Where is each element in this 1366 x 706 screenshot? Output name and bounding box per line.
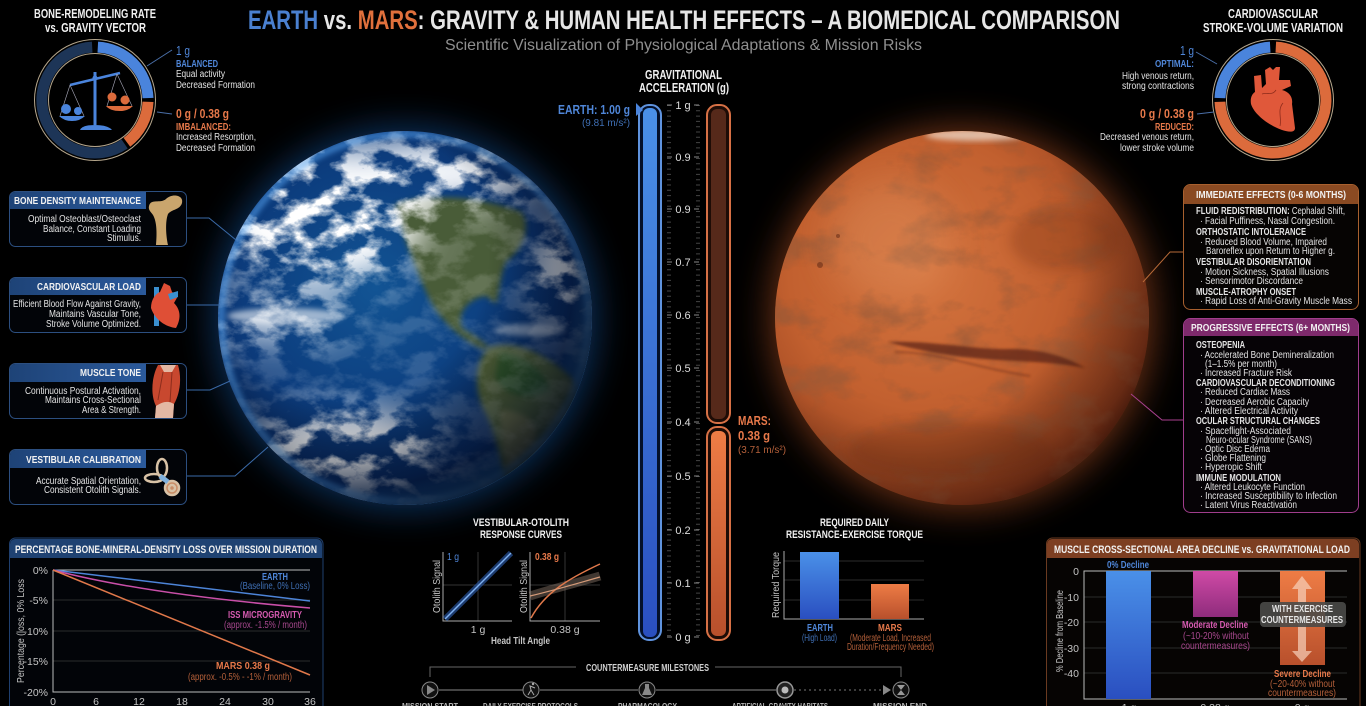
list: progressive effects [1196, 340, 1337, 511]
scale ticks: 0.2 [675, 525, 691, 537]
connectors: earth [187, 218, 268, 476]
list: progressive effects: · Accelerated Bone Demineralization [1200, 350, 1334, 361]
label: mars gravity: 0.38 g [738, 428, 770, 443]
planet: Mars [771, 127, 1153, 509]
panel: immediate effects [1184, 184, 1358, 310]
list: progressive effects: OCULAR STRUCTURAL CHANGES [1196, 416, 1320, 427]
label: earth gravity [558, 102, 630, 129]
axis labels: -15% [23, 656, 48, 668]
line label: ISS: ISS MICROGRAVITY [228, 610, 302, 621]
line label: earth: (Baseline, 0% Loss) [240, 581, 310, 592]
bars [800, 552, 909, 619]
bone remodeling widget [34, 7, 256, 160]
icon: inner ear [145, 459, 179, 495]
bars [1106, 571, 1325, 699]
line label: mars [188, 661, 292, 683]
bar label: moderate: (~10-20% without [1183, 631, 1249, 642]
legend: balanced: 1 g [176, 44, 190, 58]
callout: with exercise [1260, 602, 1346, 627]
axis labels [431, 560, 580, 647]
donut ring [1212, 40, 1334, 160]
legend: reduced: REDUCED: [1155, 122, 1194, 133]
timeline: countermeasure milestones [402, 662, 927, 706]
list: progressive effects: · Globe Flattening [1200, 453, 1266, 464]
legend: balanced: BALANCED [176, 59, 218, 70]
axis labels: 0% [33, 565, 48, 577]
panel: bone mineral density chart [10, 538, 323, 706]
chart: resistance exercise torque [770, 517, 934, 653]
heading: vestibular [473, 517, 569, 541]
heading: gravitational acceleration: ACCELERATION (g) [639, 81, 729, 95]
legend: optimal: High venous return, [1122, 71, 1194, 82]
scale ticks: 0 g [675, 632, 691, 644]
heading: bone remodeling: BONE-REMODELING RATE [34, 7, 156, 21]
legend: imbalanced: 0 g / 0.38 g [176, 107, 229, 121]
panel: bone density maintenance: Balance, Constant Loading [43, 224, 141, 235]
heading: gravitational acceleration: GRAVITATIONAL [645, 68, 722, 82]
icon: anatomical heart [151, 283, 180, 328]
list: progressive effects: · Spaceflight-Associated [1200, 426, 1291, 437]
callout: with exercise: COUNTERMEASURES [1261, 615, 1343, 626]
list: progressive effects: · Latent Virus Reactivation [1200, 500, 1297, 511]
icon: hourglass [893, 682, 909, 698]
stroke volume widget [1100, 7, 1343, 160]
list: immediate effects: · Facial Puffiness, Nasal Congestion. [1200, 216, 1335, 227]
heading: stroke volume: CARDIOVASCULAR [1228, 7, 1318, 21]
list: immediate effects: ORTHOSTATIC INTOLERANCE [1196, 227, 1306, 238]
list: immediate effects: · Motion Sickness, Spatial Illusions [1200, 267, 1329, 278]
scale ticks: 0.9 [675, 204, 691, 216]
axis labels: Percentage (loss, 0% Loss [15, 579, 27, 683]
axis labels: -40 [1064, 668, 1079, 680]
chart lines [53, 570, 310, 675]
bar label: severe: Severe Decline [1274, 669, 1331, 680]
chart: vestibular otolith curves [431, 517, 600, 647]
callout: with exercise: WITH EXERCISE [1272, 604, 1333, 615]
gravity scale [558, 68, 786, 644]
icon: runner [523, 682, 539, 698]
plot: 0.38 g: 0.38 g [535, 551, 559, 563]
label: mars gravity [738, 413, 786, 456]
panel: vestibular calibration [10, 450, 186, 504]
axis labels: -20% [23, 687, 48, 699]
list: progressive effects: Neuro-ocular Syndrome (SANS) [1206, 435, 1312, 446]
panel: muscle tone: Continuous Postural Activation, [25, 386, 141, 397]
list: immediate effects: FLUID REDISTRIBUTION: Cephalad Shift, [1196, 206, 1345, 217]
axis labels: Otolith Signal [518, 560, 530, 613]
axis labels [15, 565, 316, 706]
heading: bone remodeling: vs. GRAVITY VECTOR [45, 21, 146, 35]
axis labels [1054, 566, 1309, 706]
label: earth gravity: (9.81 m/s²) [582, 118, 630, 129]
panel: cardiovascular load: Maintains Vascular Tone, [49, 309, 141, 320]
legend: imbalanced: Decreased Formation [176, 143, 255, 154]
list: immediate effects: VESTIBULAR DISORIENTATION [1196, 257, 1311, 268]
connector: progressive effects [1131, 394, 1183, 420]
heading: vestibular: RESPONSE CURVES [480, 529, 562, 541]
panel: bone mineral density chart: PERCENTAGE BONE-MINERAL-DENSITY LOSS OVER MISSION DURATION [15, 544, 317, 556]
bar label: mars: Duration/Frequency Needed) [847, 642, 934, 653]
legend: reduced: lower stroke volume [1120, 143, 1194, 154]
label: earth gravity: EARTH: 1.00 g [558, 102, 630, 117]
title: EARTH vs. MARS: GRAVITY & HUMAN HEALTH EFFECTS – A BIOMEDICAL COMPARISON [248, 5, 1120, 35]
list: immediate effects [1196, 206, 1352, 307]
icon: habitat [777, 682, 793, 698]
list: progressive effects: · Reduced Cardiac Mass [1200, 387, 1290, 398]
double arrow [1292, 576, 1312, 662]
scale ticks: 0.1 [675, 578, 691, 590]
mars bar [707, 105, 730, 640]
panel: muscle tone [10, 364, 186, 418]
heading: torque: REQUIRED DAILY [820, 517, 889, 529]
axis labels: -30 [1064, 643, 1079, 655]
list: immediate effects: · Sensorimotor Discordance [1200, 276, 1303, 287]
line label: ISS: (approx. -1.5% / month) [224, 620, 307, 631]
list: progressive effects: · Increased Susceptibility to Infection [1200, 491, 1337, 502]
legend: optimal: 1 g [1180, 44, 1194, 58]
plot: 0.38 g [530, 551, 600, 621]
subtitle: Scientific Visualization of Physiological Adaptations & Mission Risks [445, 37, 922, 54]
axis labels: 1 g [471, 624, 485, 636]
panel: muscle tone: MUSCLE TONE [80, 367, 141, 379]
heading: gravitational acceleration [639, 68, 729, 95]
legend: imbalanced: IMBALANCED: [176, 122, 231, 133]
heading: bone remodeling [34, 7, 156, 35]
scale ticks: 0.5 [675, 363, 691, 375]
icon: start [422, 682, 438, 698]
bar label: severe: (~20-40% without [1270, 679, 1335, 690]
list: progressive effects: · Hyperopic Shift [1200, 462, 1262, 473]
bar label: moderate: Moderate Decline [1182, 620, 1248, 631]
list: progressive effects: IMMUNE MODULATION [1196, 473, 1281, 484]
plot: 1 g [443, 551, 512, 621]
legend: balanced [176, 44, 255, 91]
legend: optimal: strong contractions [1122, 81, 1194, 92]
panel: progressive effects [1184, 318, 1358, 512]
list: progressive effects: OSTEOPENIA [1196, 340, 1245, 351]
line label: mars: MARS 0.38 g [216, 661, 270, 672]
axis labels: -5% [29, 595, 48, 607]
list: progressive effects: (1–1.5% per month) [1205, 359, 1277, 370]
icon: balance scale [59, 72, 133, 130]
heading: torque: RESISTANCE-EXERCISE TORQUE [786, 529, 923, 541]
list: progressive effects: · Decreased Aerobic Capacity [1200, 397, 1309, 408]
panel: vestibular calibration: VESTIBULAR CALIBRATION [26, 454, 141, 466]
icon: femur [149, 196, 182, 245]
axis labels: -10% [23, 626, 48, 638]
axis labels: % Decline from Baseline [1054, 590, 1066, 672]
heading: torque [786, 517, 923, 541]
donut ring [34, 40, 156, 160]
list: immediate effects: MUSCLE-ATROPHY ONSET [1196, 287, 1296, 298]
scale ticks: 0.5 [675, 471, 691, 483]
icon: heart [1251, 67, 1295, 132]
bar label: moderate [1181, 620, 1250, 652]
list: progressive effects: · Altered Electrical Activity [1200, 406, 1298, 417]
plot: 1 g: 1 g [447, 551, 459, 563]
bar label: mars: (Moderate Load, Increased [850, 633, 931, 644]
bar label: earth [802, 622, 837, 644]
legend: optimal [1122, 44, 1194, 92]
bar label: severe [1268, 669, 1336, 699]
line label: earth: EARTH [262, 572, 288, 583]
icon: flask [639, 682, 655, 698]
axis labels: -10 [1064, 592, 1079, 604]
legend: imbalanced [176, 107, 256, 154]
line label: ISS [224, 610, 307, 631]
scale ticks: 1 g [675, 100, 691, 112]
legend: reduced: Decreased venous return, [1100, 132, 1194, 143]
bar label: earth: (High Load) [802, 633, 837, 644]
scale ticks: 0.4 [675, 417, 691, 429]
panel: cardiovascular load: Efficient Blood Flow Against Gravity, [13, 299, 141, 310]
axis labels: Otolith Signal [431, 560, 443, 613]
list: immediate effects: · Reduced Blood Volume, Impaired [1200, 237, 1327, 248]
bar label: 0% decline: 0% Decline [1107, 560, 1149, 571]
line label: earth [240, 572, 310, 592]
bar label: moderate: countermeasures) [1181, 641, 1250, 652]
legend: balanced: Equal activity [176, 69, 225, 80]
legend: reduced: 0 g / 0.38 g [1140, 107, 1194, 121]
axis labels: Head Tilt Angle [491, 635, 550, 647]
panel: bone density maintenance: BONE DENSITY MAINTENANCE [14, 195, 141, 207]
panel: vestibular calibration: Consistent Otolith Signals. [44, 485, 141, 496]
axis labels: 0.38 g [550, 624, 580, 636]
heading: vestibular: VESTIBULAR-OTOLITH [473, 517, 569, 529]
earth bar [636, 103, 661, 640]
axis labels: -20 [1064, 617, 1079, 629]
connector: immediate effects [1143, 252, 1183, 282]
legend: imbalanced: Increased Resorption, [176, 132, 256, 143]
list: progressive effects: · Increased Fracture Risk [1200, 368, 1292, 379]
bar label: earth: EARTH [807, 622, 833, 634]
panel: cardiovascular load: CARDIOVASCULAR LOAD [37, 281, 141, 293]
planet: Earth [214, 127, 596, 509]
scale ticks: 0.9 [675, 152, 691, 164]
list: progressive effects: · Altered Leukocyte Function [1200, 482, 1305, 493]
list: immediate effects: Baroreflex upon Return to Higher g. [1206, 246, 1335, 257]
panel: bone density maintenance [10, 192, 186, 246]
panel: bone density maintenance: Optimal Osteoblast/Osteoclast [28, 214, 141, 225]
panel: cardiovascular load [10, 278, 186, 332]
legend: balanced: Decreased Formation [176, 80, 255, 91]
list: progressive effects: · Optic Disc Edema [1200, 444, 1270, 455]
scale ticks [667, 100, 699, 644]
line label: mars: (approx. -0.5% - -1% / month) [188, 672, 292, 683]
panel: muscle tone: Area & Strength. [82, 405, 141, 416]
label: mars gravity: (3.71 m/s²) [738, 445, 786, 456]
legend: reduced [1100, 107, 1194, 154]
heading: stroke volume [1203, 7, 1343, 35]
axis label: Required Torque [770, 552, 782, 618]
panel: muscle area chart [1046, 538, 1360, 706]
heading: milestones: COUNTERMEASURE MILESTONES [586, 662, 709, 674]
milestone labels [402, 701, 927, 706]
panel: bone density maintenance: Stimulus. [107, 233, 141, 244]
panel: muscle tone: Maintains Cross-Sectional [45, 395, 141, 406]
bar label: mars: MARS [878, 622, 902, 634]
bar label: mars [847, 622, 934, 653]
panel: vestibular calibration: Accurate Spatial Orientation, [36, 476, 141, 487]
scale ticks: 0.6 [675, 310, 691, 322]
legend: optimal: OPTIMAL: [1155, 59, 1194, 70]
scale ticks: 0.7 [675, 257, 691, 269]
label: mars gravity: MARS: [738, 413, 771, 428]
panel: cardiovascular load: Stroke Volume Optimized. [46, 319, 141, 330]
bar label: severe: countermeasures) [1268, 688, 1336, 699]
icon: muscle [152, 365, 180, 418]
axis labels: 0 [1073, 566, 1079, 578]
